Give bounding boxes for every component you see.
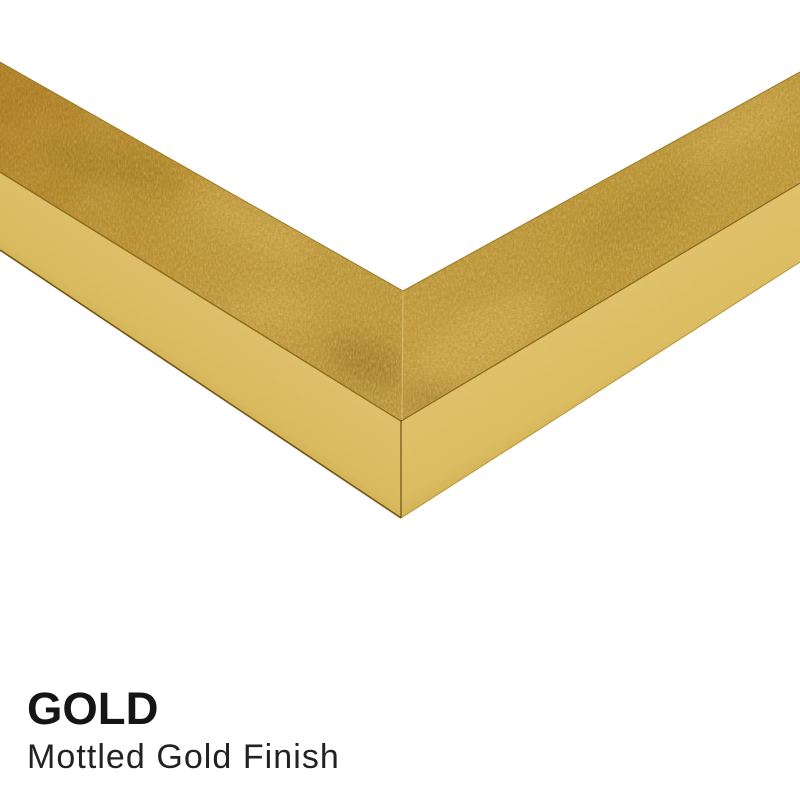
frame edges and mitre joint xyxy=(0,62,800,518)
right side face xyxy=(400,180,800,520)
left side face xyxy=(0,170,402,520)
gold frame corner illustration xyxy=(0,62,800,519)
subtitle: Mottled Gold Finish xyxy=(27,738,340,776)
right top face xyxy=(396,60,800,430)
left top face xyxy=(0,50,410,430)
title: GOLD xyxy=(27,683,158,734)
